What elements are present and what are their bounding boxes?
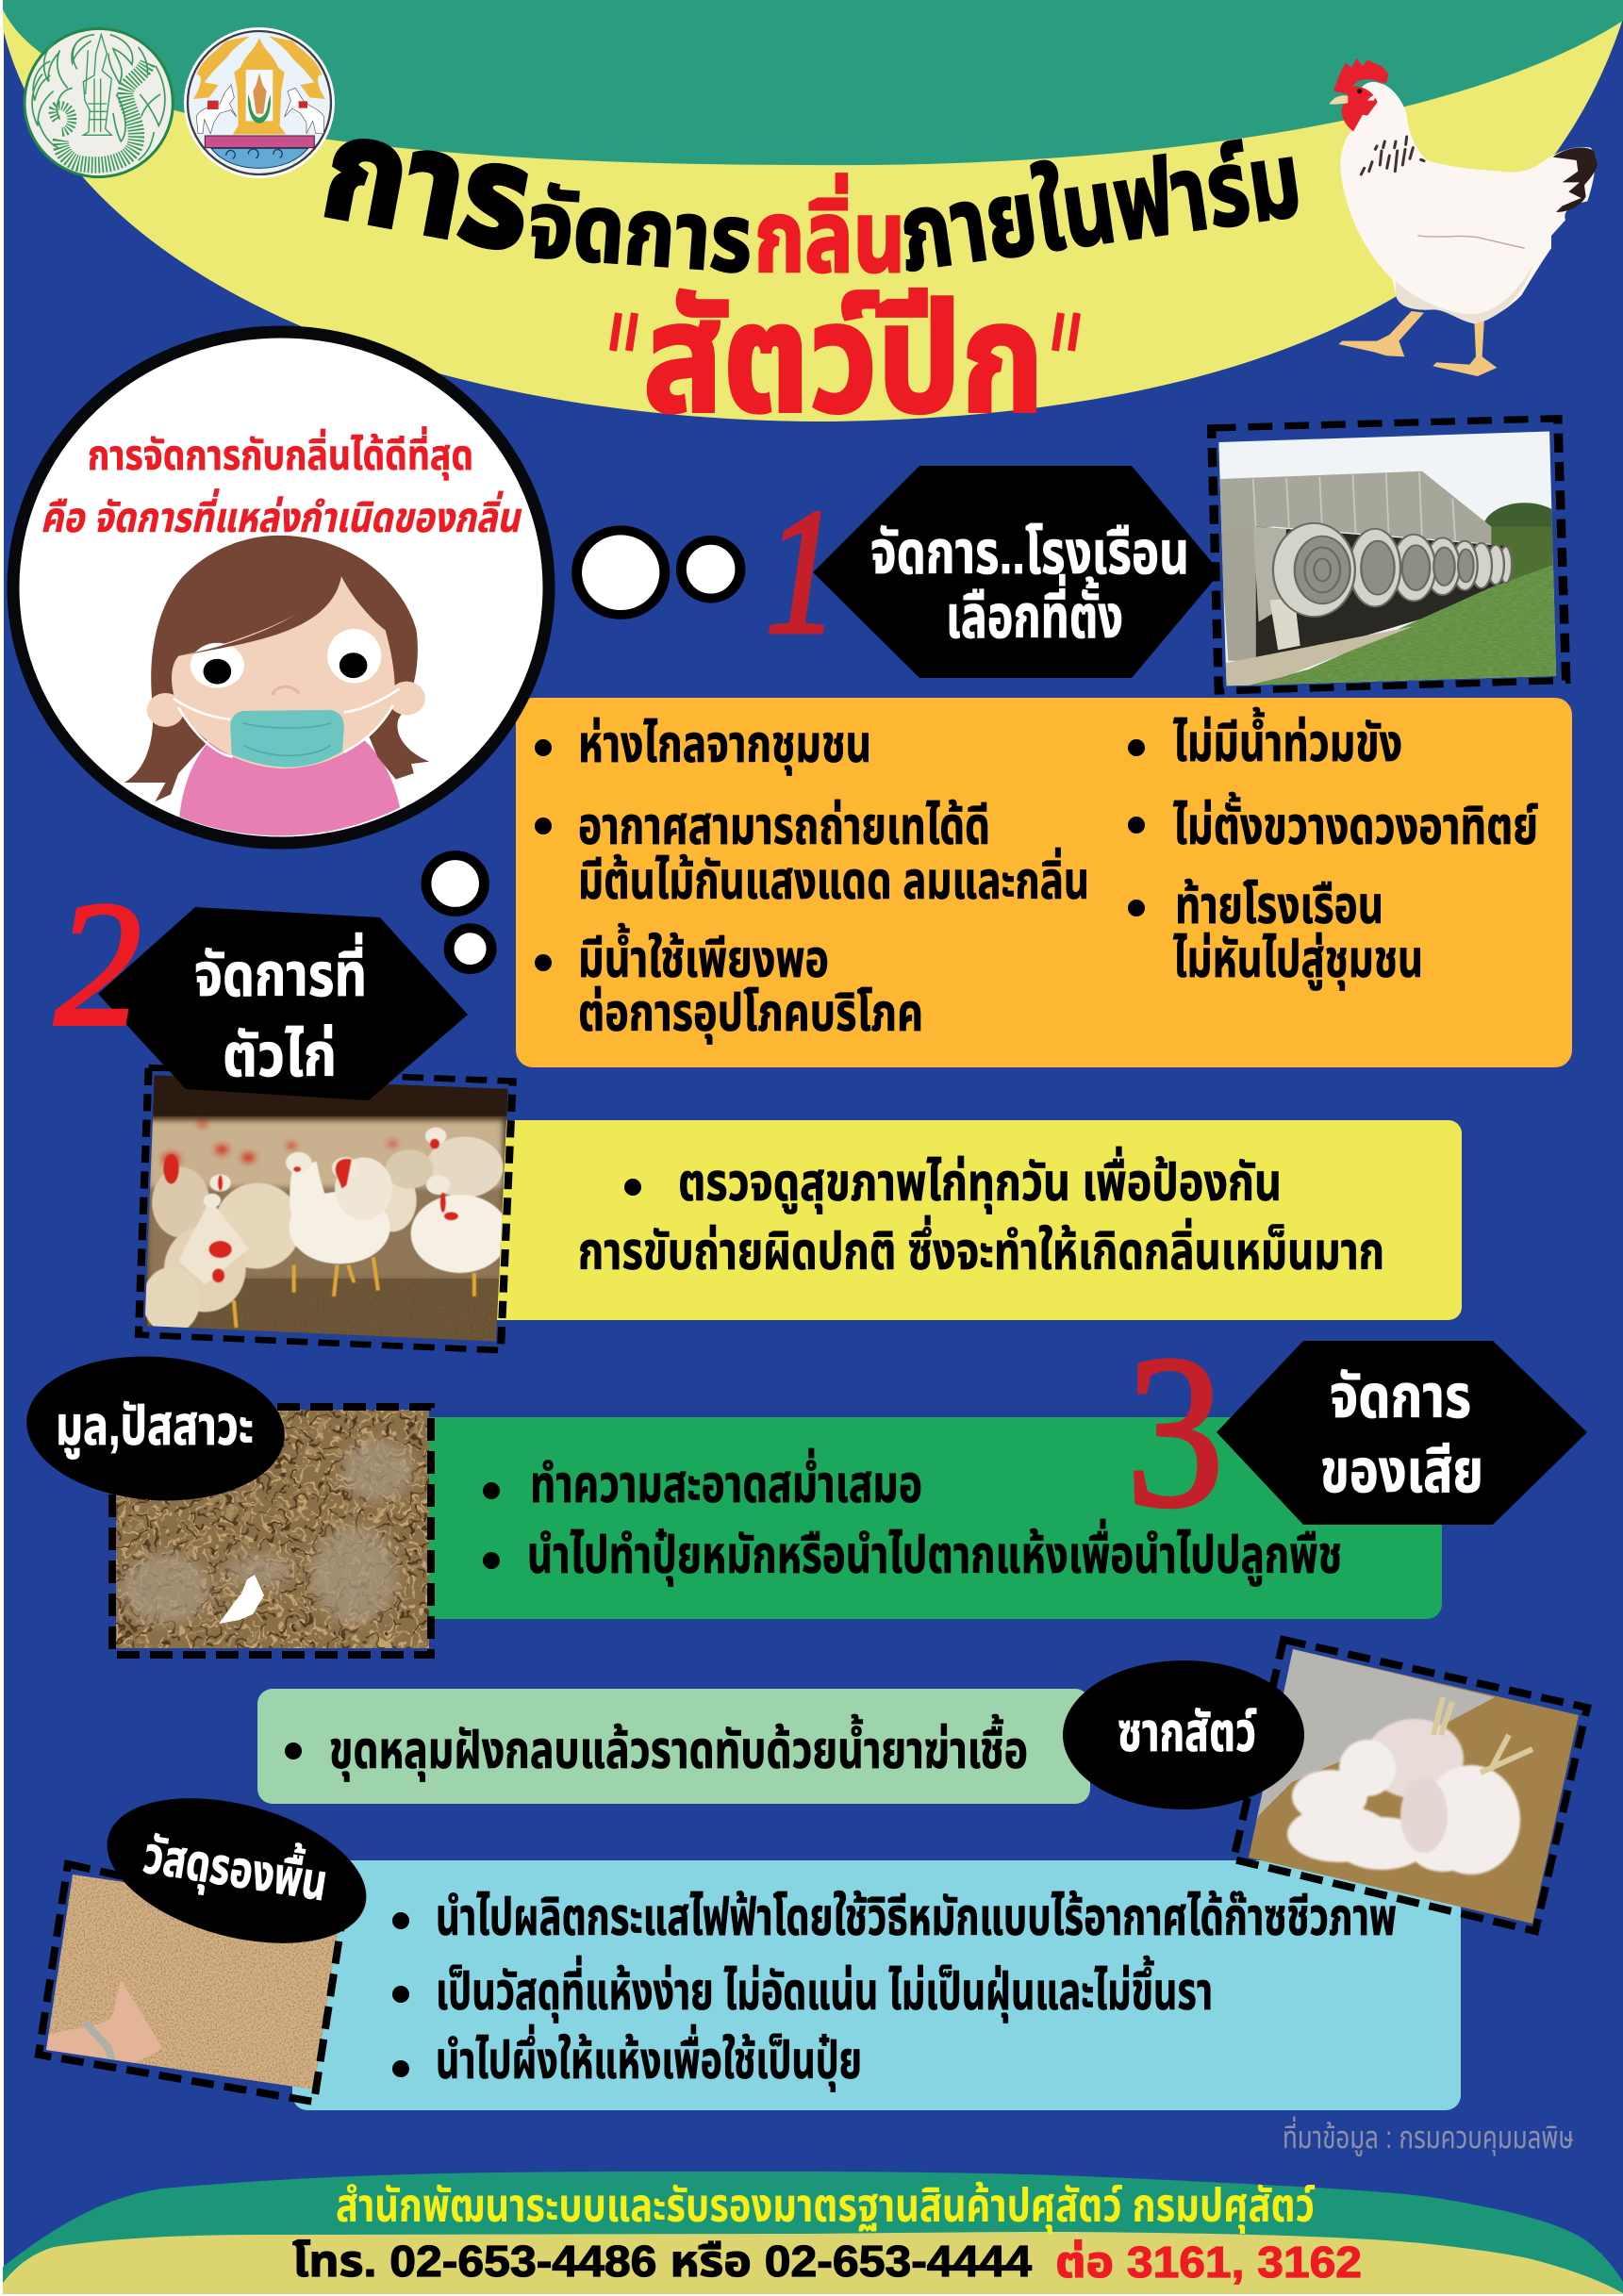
hexagon badge 3 (1217, 1341, 1587, 1525)
opening quote (613, 313, 635, 351)
hen legs (1338, 311, 1497, 376)
girl thought text line 2: คือ จัดการที่แหล่งกำเนิดของกลิ่น (41, 488, 522, 541)
hexagon badge 2: จัดการที่ (194, 933, 367, 1009)
oval tag: manure and urine: มูล,ปัสสาวะ (56, 1396, 254, 1460)
number 1: 1 (766, 473, 837, 671)
orange panel text: ไม่หันไปสู่ชุมชน (1173, 930, 1423, 991)
number 2: 2 (55, 866, 141, 1064)
footer: green band (3, 2172, 1623, 2296)
orange panel text: มีน้ำใช้เพียงพอ (578, 922, 829, 988)
hexagon badge 3: ของเสีย (1320, 1437, 1483, 1505)
footer: extensions: ต่อ 3161, 3162 (1055, 2238, 1362, 2287)
hen face (1342, 87, 1378, 131)
hen tail (1553, 148, 1598, 212)
photo: carcasses (1226, 1640, 1594, 1933)
panel: light green carcass: ขุดหลุมฝังกลบแล้วราดทับด้วยน้ำยาฆ่าเชื้อ (329, 1713, 1028, 1781)
header: yellow arc (3, 0, 1623, 421)
panel: yellow chicken health (490, 1120, 1462, 1320)
hen comb (1333, 58, 1388, 94)
logo: green seal (25, 28, 173, 177)
sawdust photo dashed frame (39, 1864, 341, 2102)
orange panel text: ท้ายโรงเรือน (1175, 876, 1383, 934)
title: การ: การ (313, 87, 544, 280)
litter photo dashed frame (112, 1407, 431, 1655)
orange panel text: ต่อการอุปโภคบริโภค (578, 983, 923, 1044)
panel: green waste (415, 1417, 1442, 1619)
hen speckled collar (1361, 137, 1424, 174)
carcass photo dashed frame (1234, 1640, 1587, 1931)
closing quote (1055, 313, 1077, 351)
footer: khaki band (3, 2232, 1623, 2294)
hexagon badge 2: ตัวไก่ (223, 1021, 337, 1089)
title: จัดการ: จัดการ (524, 172, 756, 293)
footer: organisation name: สำนักพัฒนาระบบและรับรองมาตรฐานสินค้าปศุสัตว์ กรมปศุสัตว์ (336, 2179, 1316, 2234)
logo: livestock department emblem (184, 27, 335, 178)
panel: green waste: นำไปทำปุ๋ยหมักหรือนำไปตากแห้งเพื่อนำไปปลูกพืช (527, 1518, 1342, 1587)
orange panel text: อากาศสามารถถ่ายเทได้ดี (578, 797, 990, 855)
photo: fan house (1209, 419, 1566, 691)
title line 2 (613, 273, 1077, 444)
oval tag: manure and urine (22, 1348, 290, 1509)
panel: light blue bedding: เป็นวัสดุที่แห้งง่าย ไม่อัดแน่น ไม่เป็นฝุ่นและไม่ขึ้นรา (436, 1955, 1213, 2023)
title: ภายในฟาร์ม: ภายในฟาร์ม (892, 120, 1308, 293)
oval tag: bedding material: วัสดุรองพื้น (140, 1820, 332, 1913)
title: สัตว์ปีก: สัตว์ปีก (643, 273, 1044, 444)
thought bubbles (426, 530, 740, 969)
number 3: 3 (1126, 1311, 1224, 1553)
header: green arc (3, 0, 1623, 165)
oval tag: carcass (1063, 1660, 1304, 1809)
orange panel text: ไม่มีน้ำท่วมขัง (1173, 706, 1402, 772)
hen beak (1329, 95, 1348, 105)
panel: light blue bedding (292, 1860, 1461, 2110)
hen body (1340, 82, 1595, 323)
orange panel text: ห่างไกลจากชุมชน (578, 715, 871, 775)
photo: bedding sawdust (38, 1864, 349, 2102)
panel: green waste: ทำความสะอาดสม่ำเสมอ (530, 1447, 922, 1513)
fan photo dashed frame (1212, 419, 1566, 691)
panel: yellow chicken health: ตรวจดูสุขภาพไก่ทุกวัน เพื่อป้องกัน (678, 1146, 1282, 1214)
hexagon badge 1 (813, 466, 1220, 678)
title: กลิ่น: กลิ่น (754, 173, 905, 293)
hexagon badge 2 (98, 907, 468, 1100)
panel: light green carcass (257, 1689, 1090, 1804)
orange panel text (535, 706, 1538, 1044)
footer: phone numbers: โทร. 02-653-4486 หรือ 02-653-4444 (292, 2237, 1032, 2286)
orange panel text: มีต้นไม้กันแสงแดด ลมและกลิ่น (578, 847, 1089, 910)
girl thought text line 1: การจัดการกับกลิ่นได้ดีที่สุด (88, 426, 473, 481)
panel: light blue bedding: นำไปผึ่งให้แห้งเพื่อใช้เป็นปุ๋ย (436, 2023, 862, 2091)
thought bubble: girl with mask (13, 332, 549, 843)
hexagon badge 3: จัดการ (1330, 1363, 1471, 1430)
hexagon badge 1: จัดการ..โรงเรือน (870, 519, 1189, 586)
flock photo dashed frame (139, 1067, 513, 1350)
illustration: white hen (1329, 58, 1598, 376)
title line 1 (313, 87, 1308, 293)
oval tag: bedding material (91, 1773, 382, 1969)
panel: yellow chicken health: การขับถ่ายผิดปกติ ซึ่งจะทำให้เกิดกลิ่นเหม็นมาก (578, 1214, 1384, 1280)
photo: manure litter (108, 1403, 435, 1659)
oval tag: carcass: ซากสัตว์ (1118, 1702, 1256, 1763)
girl illustration (124, 536, 429, 836)
emblem ornaments (193, 36, 325, 135)
photo: flock of chickens (138, 1067, 518, 1351)
hexagon badge 1: เลือกที่ตั้ง (946, 574, 1123, 651)
panel: orange site rules (516, 698, 1572, 1067)
